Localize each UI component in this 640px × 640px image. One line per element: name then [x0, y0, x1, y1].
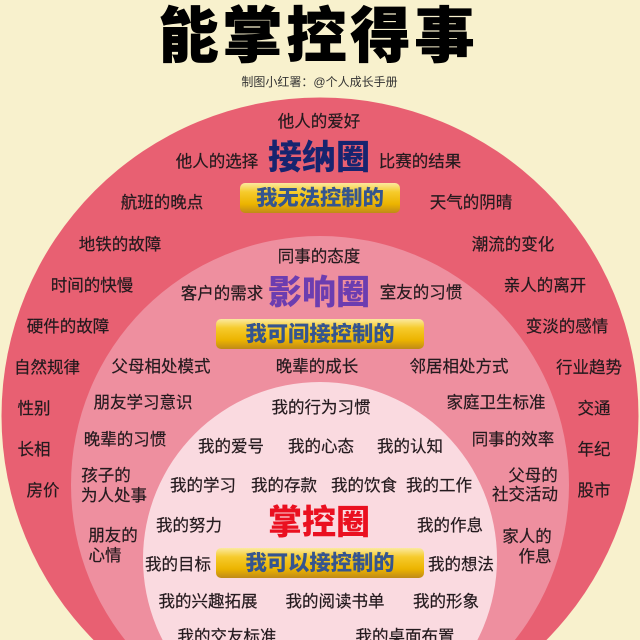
items: acceptance circle — [14, 112, 622, 500]
items: acceptance circle: 亲人的离开 — [504, 276, 586, 295]
items: control circle: 我的想法 — [428, 555, 494, 574]
items: influence circle: 父母的 — [508, 466, 558, 485]
items: influence circle: 家人的 — [502, 527, 552, 546]
items: acceptance circle: 交通 — [578, 399, 610, 418]
items: control circle: 我的学习 — [170, 476, 236, 495]
subtitle credit: 制图小红署：@个人成长手册 — [241, 74, 398, 89]
pill: cannot control — [240, 183, 400, 213]
items: influence circle: 作息 — [518, 547, 552, 566]
heading: 影响圈: 影响圈 — [268, 274, 370, 312]
items: acceptance circle: 长相 — [18, 440, 50, 459]
items: influence circle: 晚辈的成长 — [276, 357, 358, 376]
items: acceptance circle: 他人的爱好 — [278, 112, 360, 131]
items: influence circle: 父母相处模式 — [112, 357, 210, 376]
items: influence circle: 朋友的 — [88, 526, 138, 545]
items: acceptance circle: 硬件的故障 — [27, 317, 109, 336]
items: control circle — [145, 398, 494, 640]
items: influence circle: 朋友学习意识 — [94, 393, 192, 412]
items: acceptance circle: 地铁的故障 — [79, 235, 161, 254]
items: acceptance circle: 行业趋势 — [556, 358, 622, 377]
items: influence circle: 客户的需求 — [181, 284, 263, 303]
items: influence circle — [81, 247, 558, 566]
items: acceptance circle: 股市 — [578, 481, 610, 500]
items: influence circle: 社交活动 — [492, 485, 558, 504]
items: control circle: 我的行为习惯 — [272, 398, 370, 417]
items: control circle: 我的兴趣拓展 — [158, 592, 258, 611]
items: control circle: 我的心态 — [288, 437, 354, 456]
heading: 接纳圈: 接纳圈 — [268, 139, 370, 177]
items: influence circle: 为人处事 — [81, 486, 147, 505]
items: influence circle: 邻居相处方式 — [410, 357, 508, 376]
items: control circle: 我的目标 — [145, 555, 211, 574]
items: acceptance circle: 性别 — [18, 399, 50, 418]
items: acceptance circle: 年纪 — [578, 440, 610, 459]
circle: influence zone — [71, 236, 569, 640]
heading: 掌控圈: 掌控圈 — [268, 503, 370, 542]
items: influence circle: 家庭卫生标准 — [446, 393, 546, 412]
pill: cannot control: 我无法控制的 — [256, 186, 384, 210]
items: control circle: 我的爱号 — [198, 437, 264, 456]
items: control circle: 我的阅读书单 — [286, 592, 384, 611]
items: influence circle: 室友的习惯 — [380, 283, 462, 302]
items: acceptance circle: 变淡的感情 — [526, 317, 608, 336]
items: acceptance circle: 时间的快慢 — [51, 275, 133, 295]
items: control circle: 我的认知 — [377, 437, 443, 456]
items: acceptance circle: 房价 — [26, 481, 60, 500]
title: 能掌控得事 — [158, 3, 478, 70]
items: control circle: 我的工作 — [406, 476, 472, 495]
items: influence circle: 同事的态度 — [278, 247, 360, 266]
items: influence circle: 同事的效率 — [472, 430, 554, 449]
items: control circle: 我的努力 — [156, 516, 222, 535]
panel: acceptance circle content — [14, 112, 622, 500]
items: acceptance circle: 潮流的变化 — [472, 235, 554, 254]
circle: control zone — [143, 382, 497, 640]
items: acceptance circle: 航班的晚点 — [121, 193, 203, 212]
pill: indirect control — [216, 319, 424, 349]
items: influence circle: 心情 — [88, 546, 122, 565]
items: influence circle: 晚辈的习惯 — [84, 430, 166, 449]
items: control circle: 我的作息 — [417, 516, 483, 535]
panel: control circle content — [145, 398, 494, 640]
items: acceptance circle: 比赛的结果 — [379, 151, 461, 171]
pill: can control: 我可以接控制的 — [245, 551, 395, 575]
items: control circle: 我的存款 — [251, 476, 318, 495]
items: control circle: 我的饮食 — [331, 476, 398, 495]
pill: indirect control: 我可间接控制的 — [245, 322, 395, 346]
items: acceptance circle: 自然规律 — [14, 358, 80, 377]
items: control circle: 我的形象 — [413, 592, 479, 611]
pill: can control — [216, 548, 424, 578]
panel: influence circle content — [81, 247, 558, 566]
items: acceptance circle: 他人的选择 — [176, 152, 259, 171]
items: influence circle: 孩子的 — [81, 466, 131, 485]
items: acceptance circle: 天气的阴晴 — [430, 193, 512, 212]
